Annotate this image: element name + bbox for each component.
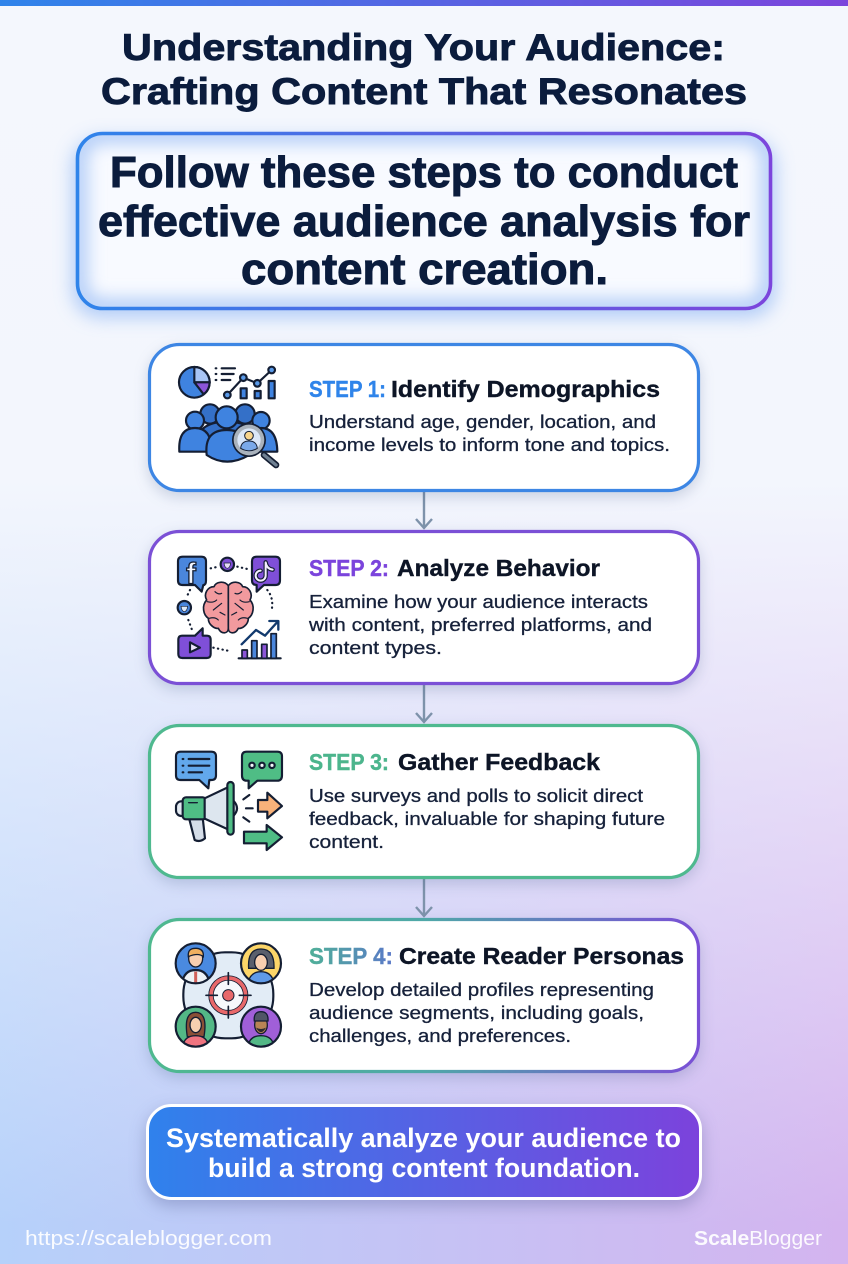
step 2 heading: STEP 2: (309, 555, 389, 581)
step 2 description: Examine how your audience interacts (309, 591, 648, 612)
step 2 heading: Analyze Behavior (397, 555, 600, 581)
step 2 heading (309, 555, 600, 581)
step 4 description: Develop detailed profiles representing (309, 979, 654, 1000)
panel: intro callout (72, 134, 776, 318)
icon: audience demographics (179, 367, 277, 465)
step 1 heading: STEP 1: (309, 376, 386, 402)
step 4 description: challenges, and preferences. (309, 1025, 571, 1046)
step 1 description: Understand age, gender, location, and (309, 411, 656, 432)
step 4 heading: STEP 4: (309, 943, 393, 969)
step 3 description: feedback, invaluable for shaping future (309, 808, 665, 829)
step 2 description: with content, preferred platforms, and (308, 614, 652, 635)
icon: behavior brain and social platforms: f (186, 558, 196, 591)
icon: megaphone feedback (176, 752, 282, 850)
panel: closing call to action (148, 1106, 700, 1198)
step 1 heading: Identify Demographics (391, 376, 660, 402)
step 3 description: Use surveys and polls to solicit direct (309, 785, 644, 806)
step 4 description: audience segments, including goals, (309, 1002, 644, 1023)
step 3 heading: STEP 3: (309, 749, 389, 775)
step 2 description: content types. (309, 637, 442, 658)
panel: closing call to action: build a strong content foundation. (208, 1153, 640, 1183)
arrow: step 1 to step 2 (416, 490, 432, 528)
panel: step 1 (150, 344, 698, 490)
top gradient bar (0, 0, 848, 6)
icon: behavior brain and social platforms (178, 557, 281, 658)
step 1 description (309, 411, 670, 455)
step 3 description (309, 785, 665, 852)
panel: intro callout: Follow these steps to conduct (110, 149, 738, 197)
step 1 description: income levels to inform tone and topics. (309, 434, 670, 455)
panel: step 2 (150, 532, 698, 684)
title (101, 26, 747, 112)
step 3 description: content. (309, 831, 384, 852)
arrow: step 2 to step 3 (416, 684, 432, 722)
panel: step 4 (150, 920, 698, 1072)
title: Crafting Content That Resonates (101, 70, 747, 112)
step 4 heading: Create Reader Personas (399, 943, 684, 969)
footer brand: ScaleBlogger (694, 1228, 822, 1250)
panel: intro callout: effective audience analysis for (98, 198, 750, 246)
step 4 description (309, 979, 654, 1046)
arrow: step 3 to step 4 (416, 878, 432, 916)
panel: closing call to action: Systematically analyze your audience to (166, 1123, 681, 1153)
step 2 description (308, 591, 652, 658)
step 3 heading: Gather Feedback (398, 749, 601, 775)
panel: step 3 (150, 726, 698, 878)
panel: intro callout: content creation. (241, 246, 608, 294)
title: Understanding Your Audience: (122, 26, 725, 68)
step 3 heading (309, 749, 601, 775)
footer url: https://scaleblogger.com (25, 1228, 272, 1250)
icon: reader personas and target (176, 943, 281, 1048)
